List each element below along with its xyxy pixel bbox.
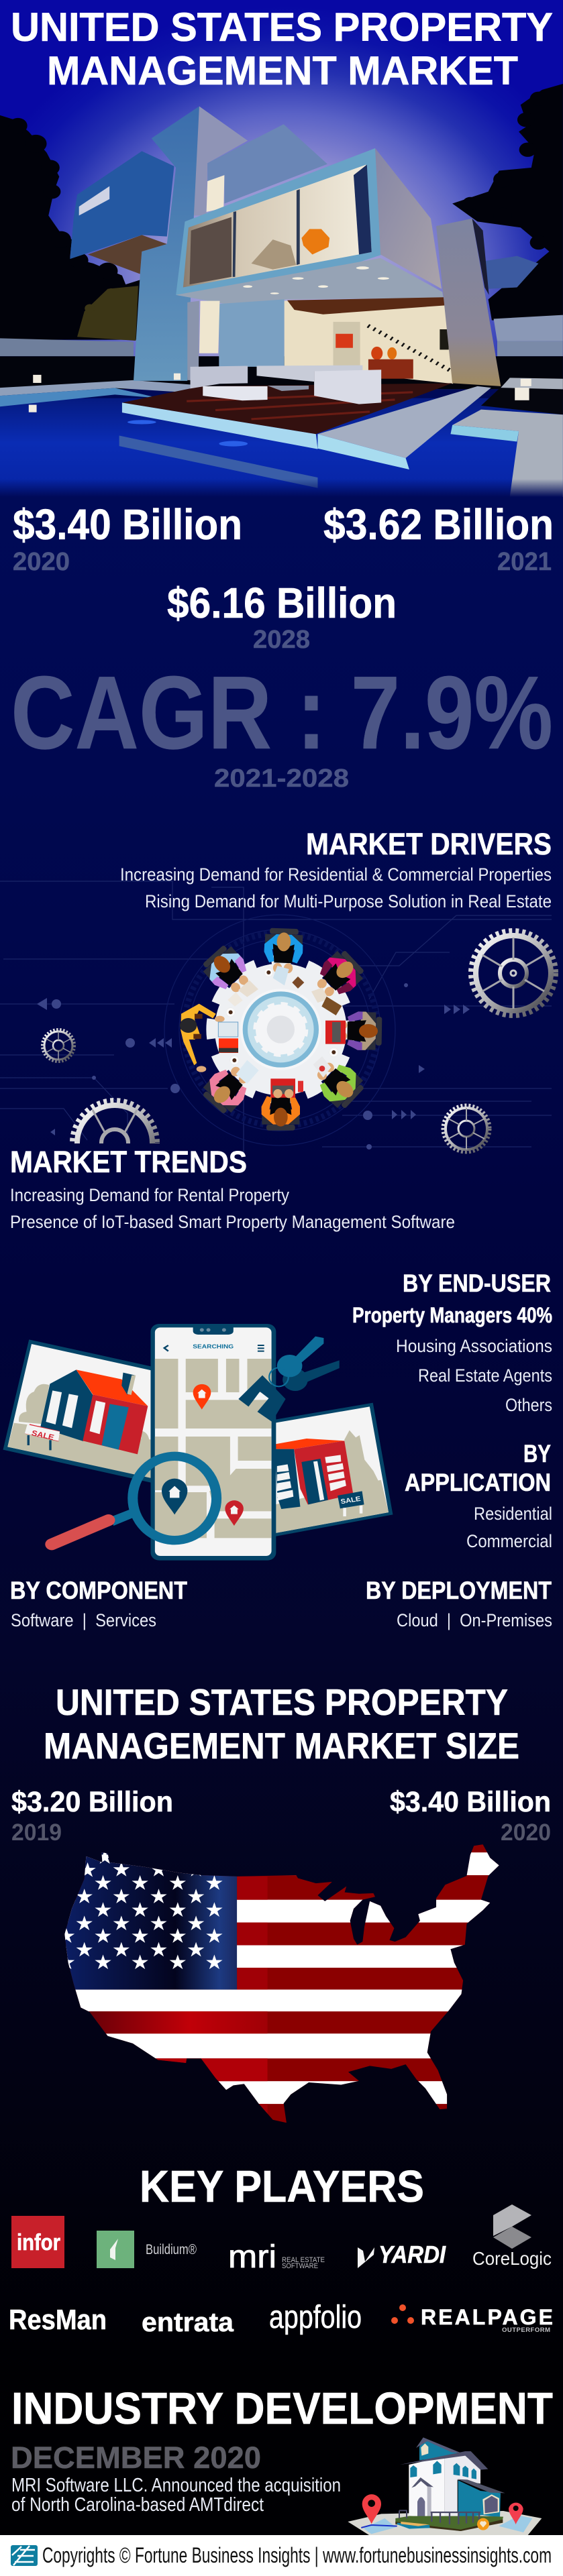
logo: MRI: mri bbox=[228, 2239, 276, 2275]
market size: 2019: 2019 bbox=[11, 1819, 62, 1846]
main glass box bbox=[176, 148, 444, 304]
logo: Buildium: Buildium® bbox=[146, 2242, 197, 2257]
folded map bbox=[348, 2511, 542, 2535]
key players heading: KEY PLAYERS bbox=[140, 2162, 424, 2212]
person: purple and tan bbox=[337, 1011, 382, 1050]
person: magenta shirt bbox=[309, 946, 368, 1005]
logo: Buildium bbox=[97, 2231, 197, 2268]
magnifying glass bbox=[52, 1456, 217, 1545]
segment: by application: BY bbox=[523, 1440, 551, 1467]
logo: Entrata: entrata bbox=[142, 2308, 234, 2337]
logo: MRI bbox=[228, 2239, 325, 2275]
development description: MRI Software LLC. Announced the acquisition bbox=[11, 2475, 341, 2496]
house on map illustration bbox=[348, 2437, 542, 2535]
market size: 2020 bbox=[390, 1786, 551, 1846]
person: lilac shirt bbox=[199, 942, 257, 1001]
wooden deck bbox=[122, 383, 452, 434]
right column bbox=[436, 219, 501, 386]
table outer ring bbox=[184, 933, 377, 1126]
coffee in cups bbox=[229, 970, 336, 1062]
map pin: red bbox=[225, 1500, 244, 1526]
map pin: left bbox=[362, 2494, 381, 2524]
documents on the table bbox=[218, 966, 331, 1092]
stat: 2021: 2021 bbox=[497, 548, 552, 576]
footer logo bbox=[11, 2545, 38, 2566]
logo: RealPage: REALPAGE bbox=[421, 2305, 553, 2329]
deck edge bbox=[122, 402, 317, 449]
trees right bbox=[452, 84, 563, 321]
segment: by application: Residential bbox=[474, 1504, 552, 1524]
gear: right bottom bbox=[443, 1105, 490, 1152]
map pin: right bbox=[509, 2503, 523, 2524]
laptop right bbox=[325, 1021, 346, 1044]
person: standing in yellow bbox=[180, 1004, 225, 1072]
market drivers bbox=[120, 827, 552, 911]
trees left bbox=[0, 115, 140, 340]
title bbox=[11, 5, 553, 93]
segment: by end-user bbox=[352, 1270, 552, 1415]
development description: of North Carolina-based AMTdirect bbox=[11, 2494, 264, 2516]
person: blue shirt bbox=[264, 928, 303, 974]
flag stripes bbox=[61, 1843, 506, 2128]
map blocks bbox=[155, 1359, 272, 1538]
property search illustration bbox=[3, 1324, 393, 1561]
open living room bbox=[285, 297, 453, 384]
market trends: Presence of IoT-based Smart Property Management Software bbox=[10, 1212, 455, 1232]
segment: by end-user: Others bbox=[505, 1395, 552, 1415]
stat: 2021 bbox=[323, 500, 554, 576]
house walls bbox=[400, 2451, 505, 2521]
phone: SEARCHING bbox=[193, 1343, 234, 1350]
logo: MRI: SOFTWARE bbox=[282, 2262, 318, 2270]
development description bbox=[11, 2475, 341, 2516]
title: MANAGEMENT MARKET bbox=[47, 48, 518, 93]
logo: RealPage: OUTPERFORM bbox=[502, 2327, 550, 2334]
gear: small left bbox=[42, 1029, 74, 1062]
logo: AppFolio: appfolio bbox=[269, 2300, 362, 2335]
right house card bbox=[272, 1403, 393, 1537]
market trends: MARKET TRENDS bbox=[10, 1145, 247, 1179]
hero photo: modern house at dusk bbox=[0, 0, 563, 497]
segment: by deployment bbox=[366, 1577, 552, 1630]
top dormer bbox=[416, 2437, 461, 2460]
tower bbox=[134, 106, 199, 381]
coffee cups bbox=[226, 968, 338, 1065]
segment: by application: Commercial bbox=[466, 1531, 552, 1551]
market size: 2020: $3.40 Billion bbox=[390, 1786, 551, 1818]
left house card: SALE bbox=[30, 1429, 55, 1442]
entrance porch bbox=[411, 2477, 433, 2520]
briefcase bbox=[321, 997, 342, 1015]
title: UNITED STATES PROPERTY bbox=[11, 5, 553, 50]
footer bbox=[0, 2535, 563, 2576]
right paving bbox=[450, 378, 563, 497]
stat: 2028: $6.16 Billion bbox=[167, 579, 397, 627]
garden walls bbox=[0, 315, 563, 389]
market size: 2019: $3.20 Billion bbox=[11, 1786, 173, 1818]
phone bbox=[150, 1324, 276, 1561]
logo: CoreLogic: CoreLogic bbox=[472, 2248, 552, 2269]
garden lamps bbox=[29, 374, 531, 412]
photo fade bbox=[0, 479, 563, 497]
left cantilever box bbox=[70, 151, 174, 259]
laptop bottom bbox=[270, 1078, 295, 1098]
lawn and fence bbox=[395, 2510, 503, 2531]
stat: 2028: 2028 bbox=[253, 626, 310, 654]
heart badge bbox=[477, 2518, 489, 2530]
right house card: SALE bbox=[340, 1495, 361, 1506]
logo: CoreLogic bbox=[472, 2204, 552, 2269]
stat: 2020: 2020 bbox=[13, 548, 70, 576]
market size: 2019 bbox=[11, 1786, 173, 1846]
market size heading: UNITED STATES PROPERTY bbox=[56, 1681, 508, 1723]
gear: top right bbox=[471, 931, 556, 1015]
market size heading bbox=[44, 1681, 519, 1767]
market trends: Increasing Demand for Rental Property bbox=[10, 1185, 289, 1205]
connector nodes and arrows bbox=[37, 983, 470, 1150]
swimming pool bbox=[0, 398, 563, 497]
development date: DECEMBER 2020 bbox=[11, 2441, 261, 2475]
market trends bbox=[10, 1145, 455, 1232]
outdoor sofas bbox=[191, 366, 381, 404]
segment: by component bbox=[10, 1577, 187, 1630]
gear table with team bbox=[180, 928, 382, 1131]
keys with house keychain bbox=[238, 1337, 340, 1422]
faint rings behind table bbox=[164, 915, 395, 1145]
circuit lines bbox=[0, 881, 552, 1154]
US map with flag bbox=[58, 1843, 506, 2128]
person: green shirt bbox=[309, 1054, 368, 1113]
person: orange shirt bbox=[262, 1086, 300, 1131]
ground floor wall and window bbox=[219, 299, 285, 367]
map pin: orange bbox=[193, 1384, 211, 1410]
sky bbox=[0, 0, 563, 389]
stat: 2028 bbox=[167, 579, 397, 654]
left house card bbox=[3, 1339, 154, 1483]
upper rear block bbox=[207, 124, 327, 204]
table centre dial bbox=[240, 989, 321, 1070]
table bbox=[213, 961, 349, 1098]
pool light bbox=[127, 420, 156, 425]
trees left lit foliage bbox=[77, 286, 138, 341]
pool edge bbox=[0, 380, 192, 396]
house windows bbox=[410, 2461, 476, 2479]
gear: half, bottom left bbox=[70, 1098, 160, 1143]
concrete walkway bbox=[119, 386, 491, 488]
logo: MRI: REAL ESTATE bbox=[282, 2256, 325, 2264]
logo: Yardi: YARDI bbox=[378, 2241, 446, 2268]
logo: RealPage bbox=[391, 2304, 553, 2334]
stat: 2020: $3.40 Billion bbox=[13, 500, 242, 549]
flag canton bbox=[61, 1843, 237, 1990]
person: pink shirt bbox=[199, 1058, 257, 1117]
distant building bbox=[484, 256, 538, 289]
market size heading: MANAGEMENT MARKET SIZE bbox=[44, 1725, 519, 1767]
segment: by application bbox=[405, 1440, 552, 1551]
segment: by end-user: Housing Associations bbox=[396, 1336, 552, 1356]
market size: 2020: 2020 bbox=[501, 1819, 551, 1846]
segment: by component: Software | Services bbox=[11, 1610, 156, 1630]
map pin: navy bbox=[162, 1479, 187, 1514]
pool light two bbox=[219, 441, 248, 447]
logo: infor bbox=[11, 2216, 64, 2268]
stat: 2020 bbox=[13, 500, 242, 576]
segment: by component: BY COMPONENT bbox=[10, 1577, 187, 1604]
logo: ResMan: ResMan bbox=[9, 2304, 107, 2335]
flag stars bbox=[58, 1849, 223, 1969]
logo: infor: infor bbox=[17, 2230, 60, 2255]
CAGR: 2021-2028 bbox=[214, 765, 349, 793]
